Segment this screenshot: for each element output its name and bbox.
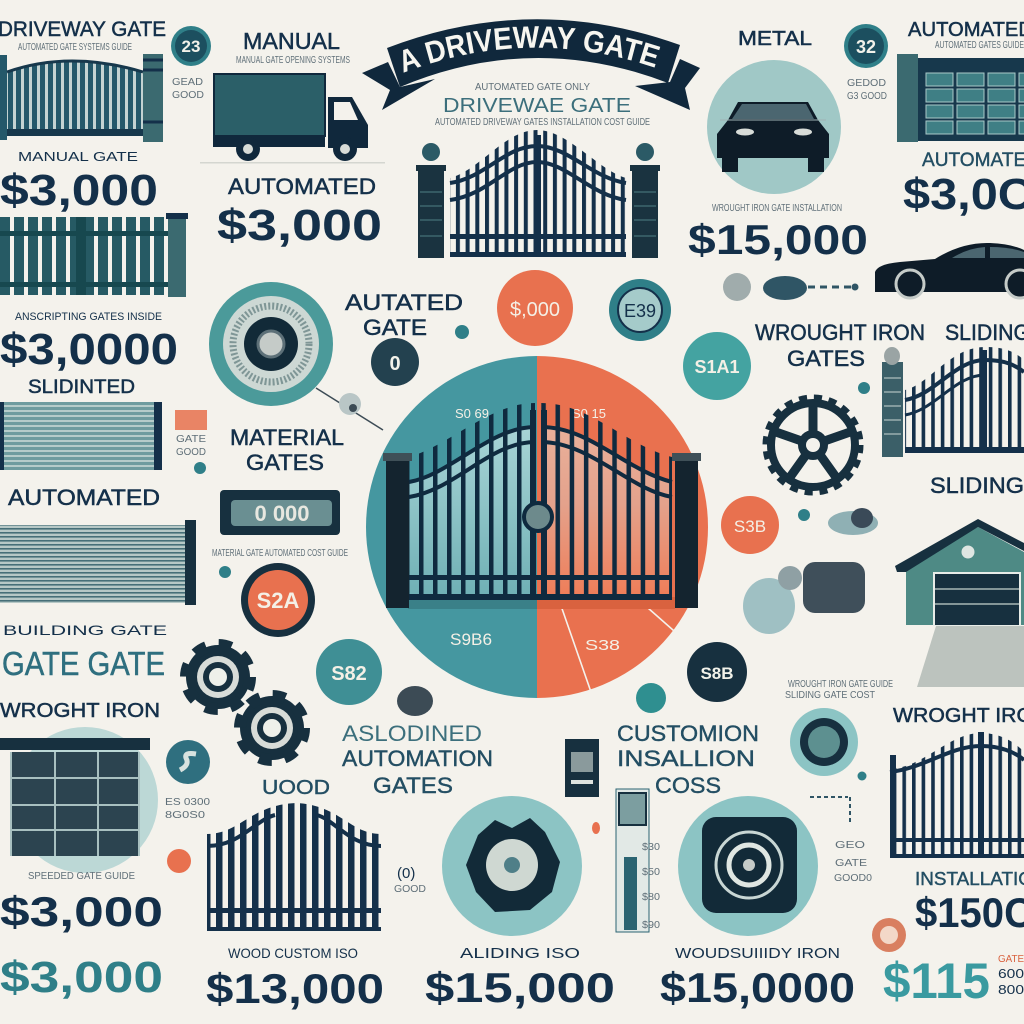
text: material gates: GATES [246,450,324,475]
icon: main top gate [416,130,660,258]
text: small caption bottom right [998,954,1024,997]
icon: display panel [220,490,340,535]
icon: speaker circle left [209,282,333,406]
text: small badge caption left: GEAD [172,77,203,88]
icon: teal price top: E39 [624,301,656,321]
text: aslodined automation gates: ASLODINED [342,721,482,746]
icon: orange price circle: S2A [257,588,300,613]
text: aslodined automation gates: GATES [373,773,453,798]
text: small caption under display: MATERIAL GATE AUTOMATED COST GUIDE [212,548,348,559]
price: left 3000 top: $3,000 [0,166,158,215]
text: sliding right: SLIDING [930,473,1024,498]
text: customion installion coss: COSS [655,773,721,798]
heading: metal: METAL [738,28,812,50]
text: small badge caption lower left: ES 0300 [165,797,211,808]
icon: gate top left [0,54,163,142]
icon: post [616,789,649,932]
icon: car front in circle [707,60,841,194]
icon: orange marker [592,822,600,834]
icon: small lock label: GOOD [394,884,426,895]
text: small caption bottom right: 800 [998,982,1024,997]
icon: control box [565,739,599,797]
text: small badge caption right: GEDOD [847,78,886,89]
text: small caption center: AUTOMATED DRIVEWAY GATES INSTALLATION COST GUIDE [435,117,650,128]
price: left 3000 lower: $3,000 [0,888,163,935]
icon: dark price lower right: S8B [700,664,734,683]
text: aliding iso: ALIDING ISO [460,945,580,962]
icon: orange price circle [241,563,315,637]
icon: car side [875,243,1024,298]
icon: small lock label: (0) [397,865,415,882]
text: small caption bottom right: GATE [998,954,1024,965]
icon: price badge top right [844,24,888,68]
text: post scale labels: $80 [642,892,660,903]
price: 15000 upper right: $15,000 [688,216,868,263]
text: wroght iron right: WROGHT IRO [893,705,1024,727]
icon: small dark badge: 0 [389,353,401,375]
text: small badge caption lower left: 8G0S0 [165,810,206,821]
text: material gates [230,425,344,475]
text: woudsuiidy iron: WOUDSUIIIDY IRON [675,945,840,962]
icon: garage window [0,727,158,873]
text: wroght iron left: WROGHT IRON [0,700,160,722]
price: bottom 13000: $13,000 [206,965,384,1012]
icon: house with driveway [895,519,1024,687]
text: small badge caption lower left [165,797,211,821]
text: wood custom small: WOOD CUSTOM ISO [228,945,358,961]
price: bottom 15000: $15,000 [425,964,615,1011]
subheading: small text: AUTOMATED GATE ONLY [475,82,590,93]
icon: pointer knob [316,388,383,430]
text: small captions lower middle right: SLIDING GATE COST [785,690,875,701]
icon: orange coin [872,918,906,952]
icon: speaker circle lower right [678,796,818,936]
icon: small badge left [166,740,210,784]
icon: orange price top [497,270,573,346]
icon: small lock label [394,865,426,895]
heading: manual: MANUAL [243,28,340,54]
center circle chart: S38 [585,637,620,654]
text: small caption manual: MANUAL GATE OPENING SYSTEMS [236,55,350,66]
icon: sliding gate panel [0,402,162,470]
text: customion installion coss: INSALLION [617,746,755,771]
icon: small tag: GATE [176,434,206,445]
icon: gear upper [186,645,250,709]
icon: orange price top: $,000 [510,299,560,321]
icon: small tag [175,410,207,474]
subheading: driveway gate: DRIVEWAE GATE [443,95,631,117]
icon: teal price top [609,279,671,341]
text: small caption right of lower circle: GOOD0 [834,873,872,884]
text: automated gate center: GATE [363,315,427,340]
text: automated gate center: AUTATED [345,290,463,315]
text: automated center left: AUTOMATED [228,174,376,199]
text: small badge caption right [847,78,887,102]
icon: speaker circle lower center [442,796,582,936]
text: post scale labels: $90 [642,920,660,931]
icon: wood gate [207,803,381,931]
text: small caption bottom right: 600 [998,966,1024,981]
center circle chart: S0 69 [455,406,489,421]
icon: lower right gate [890,732,1024,858]
icon: price badge top left [171,26,211,66]
icon: price badge top left: 23 [182,37,200,56]
icon: dark price lower right [687,642,747,702]
icon: fence [0,213,188,297]
text: installation: INSTALLATIO [915,869,1024,889]
text: slidinted: SLIDINTED [28,377,135,398]
text: automated left: AUTOMATED [8,485,160,510]
title banner: A DRIVEWAY GATE [403,26,660,73]
text: small badge caption left: GOOD [172,90,204,101]
text: post scale labels [642,842,660,931]
text: gate gate: GATE GATE [2,645,165,682]
price: right 115 teal: $115 [883,953,990,1009]
icon: teal price circle [316,639,382,705]
icon: orange dot [167,849,191,873]
center circle chart: S9B6 [450,630,492,649]
text: small caption right of lower circle [834,840,872,884]
price: left 30000: $3,0000 [0,325,178,374]
text: small caption above upper price: WROUGHT IRON GATE INSTALLATION [712,203,842,214]
text: small caption right of lower circle: GATE [835,858,867,869]
text: small caption lower left: SPEEDED GATE GUIDE [28,871,135,882]
text: customion installion coss [617,721,759,798]
price: center left 3000: $3,000 [217,201,382,250]
icon: orange price right [721,496,779,554]
text: customion installion coss: CUSTOMION [617,721,759,746]
price: bottom 150000: $15,0000 [660,964,855,1011]
text: small badge caption right: G3 GOOD [847,91,887,102]
icon: small tag: GOOD [176,447,206,458]
text: material gates: MATERIAL [230,425,344,450]
icon: rolling gate [0,520,196,605]
text: wood: UOOD [262,777,330,799]
text: small left label: ANSCRIPTING GATES INSIDE [15,311,162,323]
text: small captions lower middle right: WROUGHT IRON GATE GUIDE [788,679,893,690]
icon: dark blob [397,686,433,716]
price: right 3000: $3,0C [903,170,1024,219]
icon: dots connector [810,772,866,825]
icon: truck [200,74,385,164]
text: automated gate center [345,290,463,340]
text: wrought iron gates: WROUGHT IRON [755,320,925,345]
icon: central gate [383,403,701,609]
center circle chart [366,356,708,698]
text: small caption right of lower circle: GEO [835,840,865,851]
text: wrought iron gates: GATES [787,346,865,371]
icon: small dark parts above [723,273,858,301]
text: post scale labels: $50 [642,867,660,878]
icon: teal price right: S1A1 [694,357,740,377]
price: left 3000 teal: $3,000 [0,953,163,1002]
icon: teal dot lower center [636,683,666,713]
icon: teal price right [683,332,751,400]
icon: grey machine parts [743,382,878,634]
text: small badge caption left [172,77,204,101]
icon: display panel: 0 000 [254,501,310,526]
icon: teal price circle: S82 [331,663,367,685]
icon: large gear [766,398,860,492]
icon: orange price right: S3B [734,517,766,536]
text: small caption top left: AUTOMATED GATE SYSTEMS GUIDE [18,42,132,53]
icon: ring badge [790,708,858,776]
icon: small dark badge [371,338,419,386]
icon: right gate [882,347,1024,457]
center circle chart: S0 15 [572,406,606,421]
icon: price badge top right: 32 [856,37,876,57]
text: aslodined automation gates [342,721,493,798]
text: post scale labels: $30 [642,842,660,853]
icon: gear lower [240,696,304,760]
heading: driveway gate top left: DRIVEWAY GATE [0,18,166,41]
text: aslodined automation gates: AUTOMATION [342,746,493,771]
icon: building gate top right [897,54,1024,142]
text: manual gate small: MANUAL GATE [18,149,138,164]
icon: teal dot [455,325,469,339]
text: small captions lower middle right [785,679,893,701]
text: building gate small: BUILDING GATE [3,622,167,638]
text: wrought iron gates [755,320,925,371]
title banner [362,19,700,110]
icon: teal dot left [219,566,231,578]
